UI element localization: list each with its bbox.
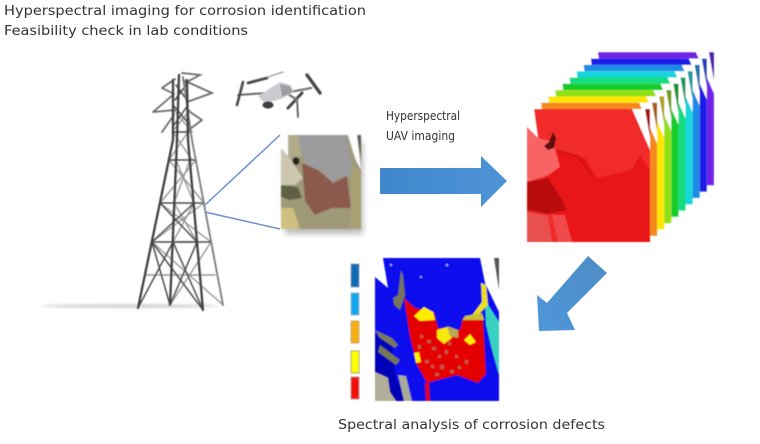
connector lines [205,135,280,229]
title: Hyperspectral imaging for corrosion identification [4,4,366,19]
title: Feasibility check in lab conditions [4,24,248,39]
heading: hyperspectral UAV imaging [386,108,460,143]
arrow: to spectral analysis [537,256,607,331]
heading: hyperspectral UAV imaging: Hyperspectral [386,108,460,123]
corrosion photo [281,135,363,234]
caption: spectral analysis: Spectral analysis of corrosion defects [338,418,605,433]
spectral classification map [375,258,499,401]
icon: drone [237,72,320,117]
arrow: to hyperspectral cube [380,156,507,207]
icon: transmission tower [42,73,223,310]
title [4,4,366,39]
heading: hyperspectral UAV imaging: UAV imaging [386,128,455,143]
legend swatches [351,264,359,399]
hyperspectral cube [527,52,714,242]
